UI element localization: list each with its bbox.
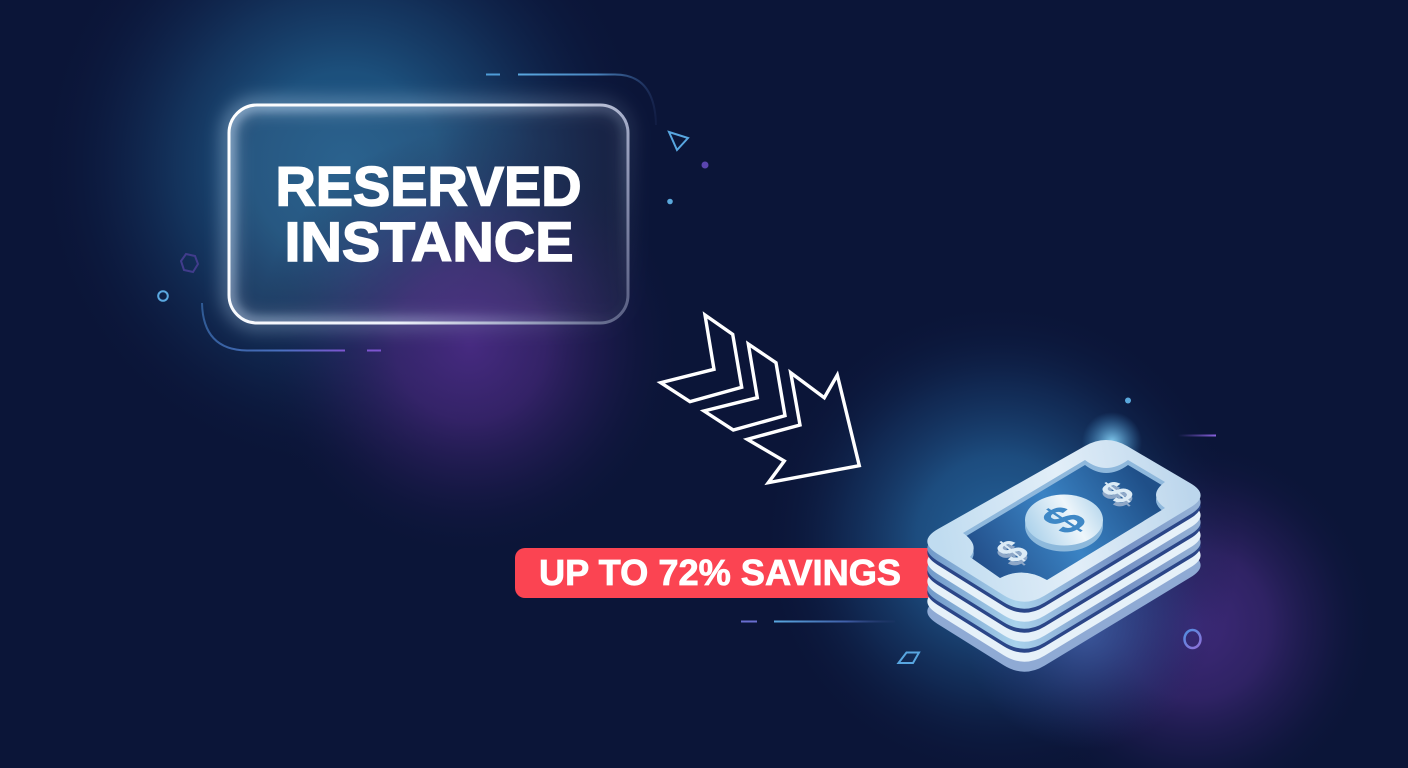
icon: pentagon outline	[181, 254, 198, 272]
bill layer 2	[927, 460, 1201, 629]
icon: ring bottom right	[1184, 630, 1200, 648]
arrow: second chevron	[704, 344, 785, 430]
bill layer 1 (top)	[927, 440, 1201, 609]
dollar sign: right: $	[1092, 479, 1144, 515]
icon: blue dot	[667, 199, 673, 204]
panel: glass card with title	[229, 105, 628, 323]
heading: RESERVED INSTANCE	[276, 154, 582, 273]
dollar sign: left: $	[987, 538, 1039, 574]
icon: blue dot top	[1125, 398, 1131, 404]
icon: blue ring	[158, 291, 168, 301]
dollar sign: left: $	[987, 534, 1039, 570]
bill layer 4	[927, 500, 1201, 672]
arrows: chevrons pointing to the money	[661, 315, 859, 483]
icon: triangle outline	[669, 132, 688, 150]
decorative line: right of money	[1178, 434, 1216, 436]
callout: savings badge: UP TO 72% SAVINGS	[539, 552, 901, 593]
decorative line: below badge	[741, 620, 895, 622]
heading: RESERVED INSTANCE: RESERVED	[276, 154, 582, 218]
illustration: stack of dollar bills	[927, 405, 1201, 672]
bill inner face	[963, 460, 1165, 585]
decorative line: top right of card	[486, 74, 656, 125]
decorative line: bottom left of card	[202, 303, 381, 350]
arrow: first chevron	[661, 315, 742, 402]
dollar sign: right: $	[1092, 475, 1144, 511]
coin: $	[1028, 498, 1100, 542]
heading: RESERVED INSTANCE: INSTANCE	[284, 210, 574, 273]
arrow: arrowhead	[747, 373, 859, 483]
icon: parallelogram outline	[898, 652, 919, 663]
icon: purple dot	[702, 162, 708, 168]
bill layer 3	[927, 480, 1201, 649]
